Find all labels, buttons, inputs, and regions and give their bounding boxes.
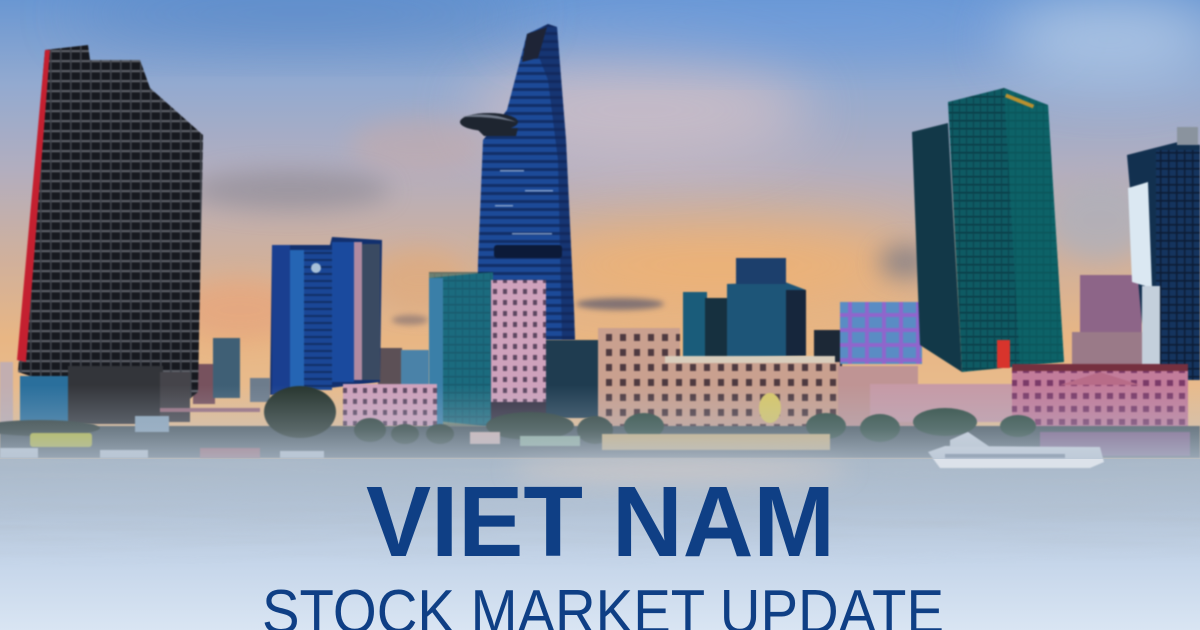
background low buildings [0,275,1146,430]
water streaks [0,459,1200,569]
river water [0,459,1200,630]
haze over waterfront [0,385,1200,459]
building: blue glass tower [270,237,382,395]
building: mid blue office [683,258,922,364]
title: VIET NAM: NAM [612,466,835,578]
building: twin teal towers [912,88,1064,372]
building: unfinished skeleton tower [17,45,203,426]
riverside trees and embankment [0,386,1200,458]
moored small boats [0,448,324,458]
building: far right hotel tower [1127,127,1200,380]
waterfront colonial buildings [343,328,1188,434]
sky background [0,0,1200,470]
building: Bitexco tower [460,24,575,340]
boat [928,432,1104,468]
title: VIET NAM: VIET [366,466,583,578]
building: glass and pink tower [429,272,602,428]
water reflection glow [510,458,850,482]
title: VIET NAM [366,466,835,578]
